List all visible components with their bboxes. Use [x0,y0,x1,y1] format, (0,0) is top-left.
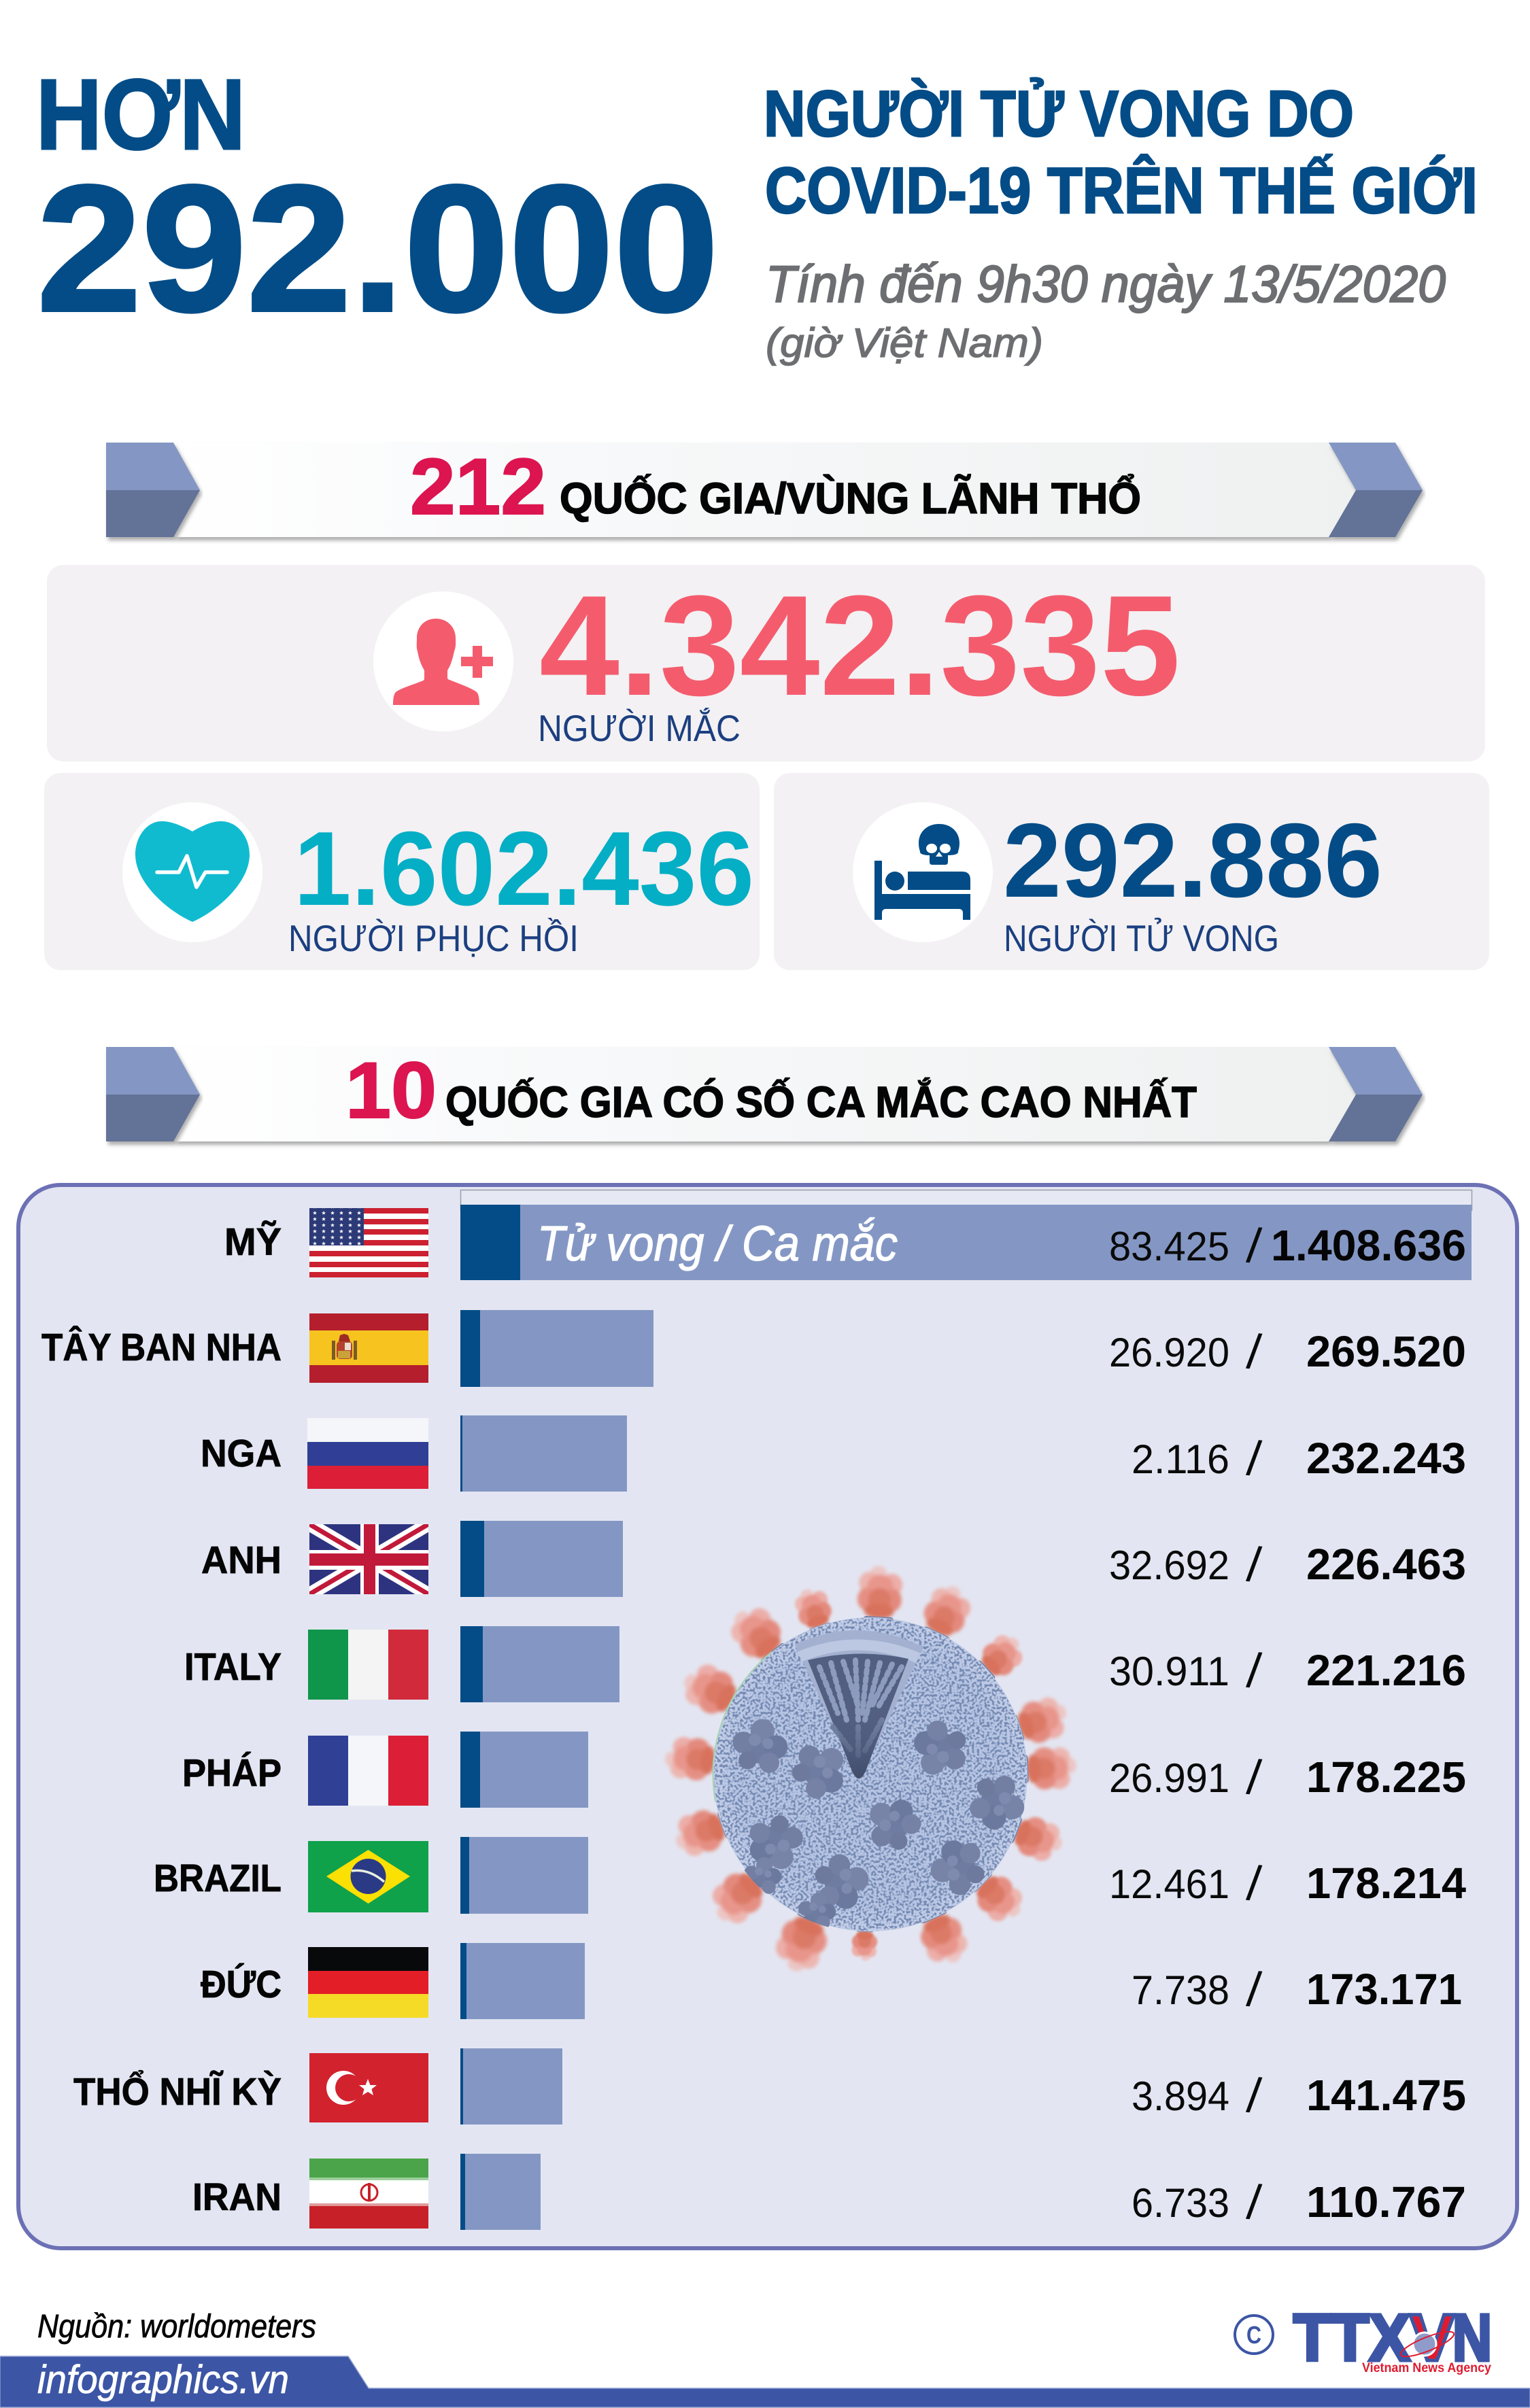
bar: Iran [460,2154,541,2230]
banner caption: QUỐC GIA/VÙNG LÃNH THỔ [560,473,1141,523]
numbers: deaths / cases: / [1245,1856,1263,1912]
label: infected: NGƯỜI MẮC [538,707,741,749]
virus surface proteins [732,1715,1030,1929]
date line: Tính đến 9h30 ngày 13/5/2020 [766,256,1446,313]
copyright mark: C [1246,2321,1261,2349]
numbers: deaths / cases: / [1245,1962,1263,2018]
banner body [173,443,1356,537]
country names: ĐỨC [201,1963,282,2006]
banner body [173,1047,1356,1141]
country names: BRAZIL [154,1857,282,1900]
agency letters [1293,2301,1492,2375]
numbers: deaths / cases: 110.767 [1306,2178,1466,2226]
panel: recovered [44,773,760,970]
number 10: 10 [345,1046,437,1135]
numbers: deaths / cases: / [1245,2068,1263,2124]
bar: France [460,1732,588,1808]
flag: United Kingdom [309,1524,428,1594]
logo: TTXVN [1235,2301,1492,2375]
title: big figure [36,59,719,349]
bar chart: deaths and cases [460,1190,1472,2230]
bar: UK [460,1521,623,1597]
footer band [0,2356,1530,2407]
numbers: deaths / cases: / [1245,1750,1263,1806]
number: recovered: 1.602.436 [294,810,754,927]
bar: Germany [460,1943,585,2019]
virus wedge cutout [795,1630,923,1782]
numbers: deaths / cases: 269.520 [1306,1327,1466,1376]
icon: heart with pulse [122,802,262,942]
numbers: deaths / cases: 12.461 [1109,1861,1229,1907]
numbers: deaths / cases: 26.920 [1109,1330,1229,1375]
country names: TÂY BAN NHA [41,1325,282,1369]
panel: deaths [774,773,1489,970]
flag: Russia [307,1418,428,1489]
agency name: Vietnam News Agency [1362,2361,1491,2375]
flag: Germany [308,1947,428,2018]
numbers: deaths / cases: 221.216 [1306,1646,1466,1695]
illustration: coronavirus [664,1565,1077,1978]
numbers: deaths / cases: 2.116 [1132,1437,1229,1482]
banner: 212 countries [106,442,1423,537]
bar: Spain [460,1310,653,1387]
numbers: deaths / cases: 7.738 [1132,1967,1229,2013]
time zone note: (giờ Việt Nam) [766,320,1043,366]
country names: IRAN [192,2175,282,2219]
virus spikes [664,1565,1077,1978]
numbers: deaths / cases: 173.171 [1306,1965,1462,2014]
numbers: deaths / cases [1109,1218,1466,2231]
source: Nguồn: worldometers [37,2309,316,2345]
bar: Russia [460,1415,627,1492]
bar: Italy [460,1626,619,1702]
agency letters: N [1452,2301,1492,2375]
label: recovered: NGƯỜI PHỤC HỒI [288,917,579,959]
title: subject and date [764,77,1478,366]
numbers: deaths / cases: 83.425 [1109,1224,1229,1269]
bar: Brazil [460,1837,588,1914]
country names: MỸ [224,1220,282,1264]
numbers: deaths / cases: 226.463 [1306,1540,1466,1589]
number 212: 212 [410,442,546,531]
banner: top 10 [106,1046,1423,1141]
country names [41,1220,282,2219]
flag: Brazil [308,1841,428,1912]
virus sphere [713,1617,1027,1931]
icon: person plus [373,591,513,732]
banner left chevron [106,1047,200,1141]
agency letters: V [1410,2301,1455,2375]
number: deaths: 292.886 [1003,802,1382,919]
banner left chevron [106,443,200,537]
bar: Turkey [460,2048,562,2125]
headline number: 292.000: 292.000 [37,148,719,349]
numbers: deaths / cases: 32.692 [1109,1543,1229,1588]
country names: PHÁP [182,1751,282,1795]
icon: bed and skull [853,802,993,942]
heading: HƠN: HƠN [36,59,245,171]
numbers: deaths / cases: 1.408.636 [1271,1221,1466,1270]
flag: France [308,1736,428,1806]
banner right chevron [1329,1047,1423,1141]
website: infographics.vn [37,2358,289,2402]
country names: THỔ NHĨ KỲ [73,2069,282,2114]
numbers: deaths / cases: / [1245,2175,1263,2231]
flag: USA [309,1208,428,1277]
numbers: deaths / cases: 178.225 [1306,1753,1466,1802]
bar: USA [460,1205,1472,1280]
chart legend: Tử vong / Ca mắc [537,1217,898,1271]
numbers: deaths / cases: 30.911 [1109,1649,1229,1694]
number: infected: 4.342.335 [539,566,1180,725]
numbers: deaths / cases: / [1245,1431,1263,1487]
flag: Turkey [309,2053,428,2122]
numbers: deaths / cases: 26.991 [1109,1755,1229,1801]
numbers: deaths / cases: 141.475 [1306,2071,1466,2120]
heading line 1: NGƯỜI TỬ VONG DO [764,77,1354,150]
numbers: deaths / cases: 6.733 [1132,2180,1229,2226]
copyright mark [1235,2316,1273,2354]
country names: ITALY [184,1645,282,1689]
numbers: deaths / cases: / [1245,1537,1263,1593]
agency letters: TTX [1293,2301,1410,2375]
flag: Iran [309,2158,428,2229]
panel: top 10 table [18,1185,1517,2248]
numbers: deaths / cases: 232.243 [1306,1434,1466,1483]
numbers: deaths / cases: / [1245,1324,1263,1380]
numbers: deaths / cases: 178.214 [1306,1859,1466,1908]
flag: Italy [308,1630,428,1700]
banner caption: QUỐC GIA CÓ SỐ CA MẮC CAO NHẤT [445,1077,1197,1126]
banner right chevron [1329,443,1423,537]
numbers: deaths / cases: / [1245,1218,1263,1274]
flag: Spain [309,1313,428,1383]
country names: NGA [201,1432,282,1475]
panel: infected [47,565,1485,761]
country names: ANH [201,1538,282,1582]
globe and orbit [1398,2327,1457,2361]
numbers: deaths / cases: / [1245,1643,1263,1699]
label: deaths: NGƯỜI TỬ VONG [1004,917,1279,959]
numbers: deaths / cases: 3.894 [1132,2074,1229,2119]
